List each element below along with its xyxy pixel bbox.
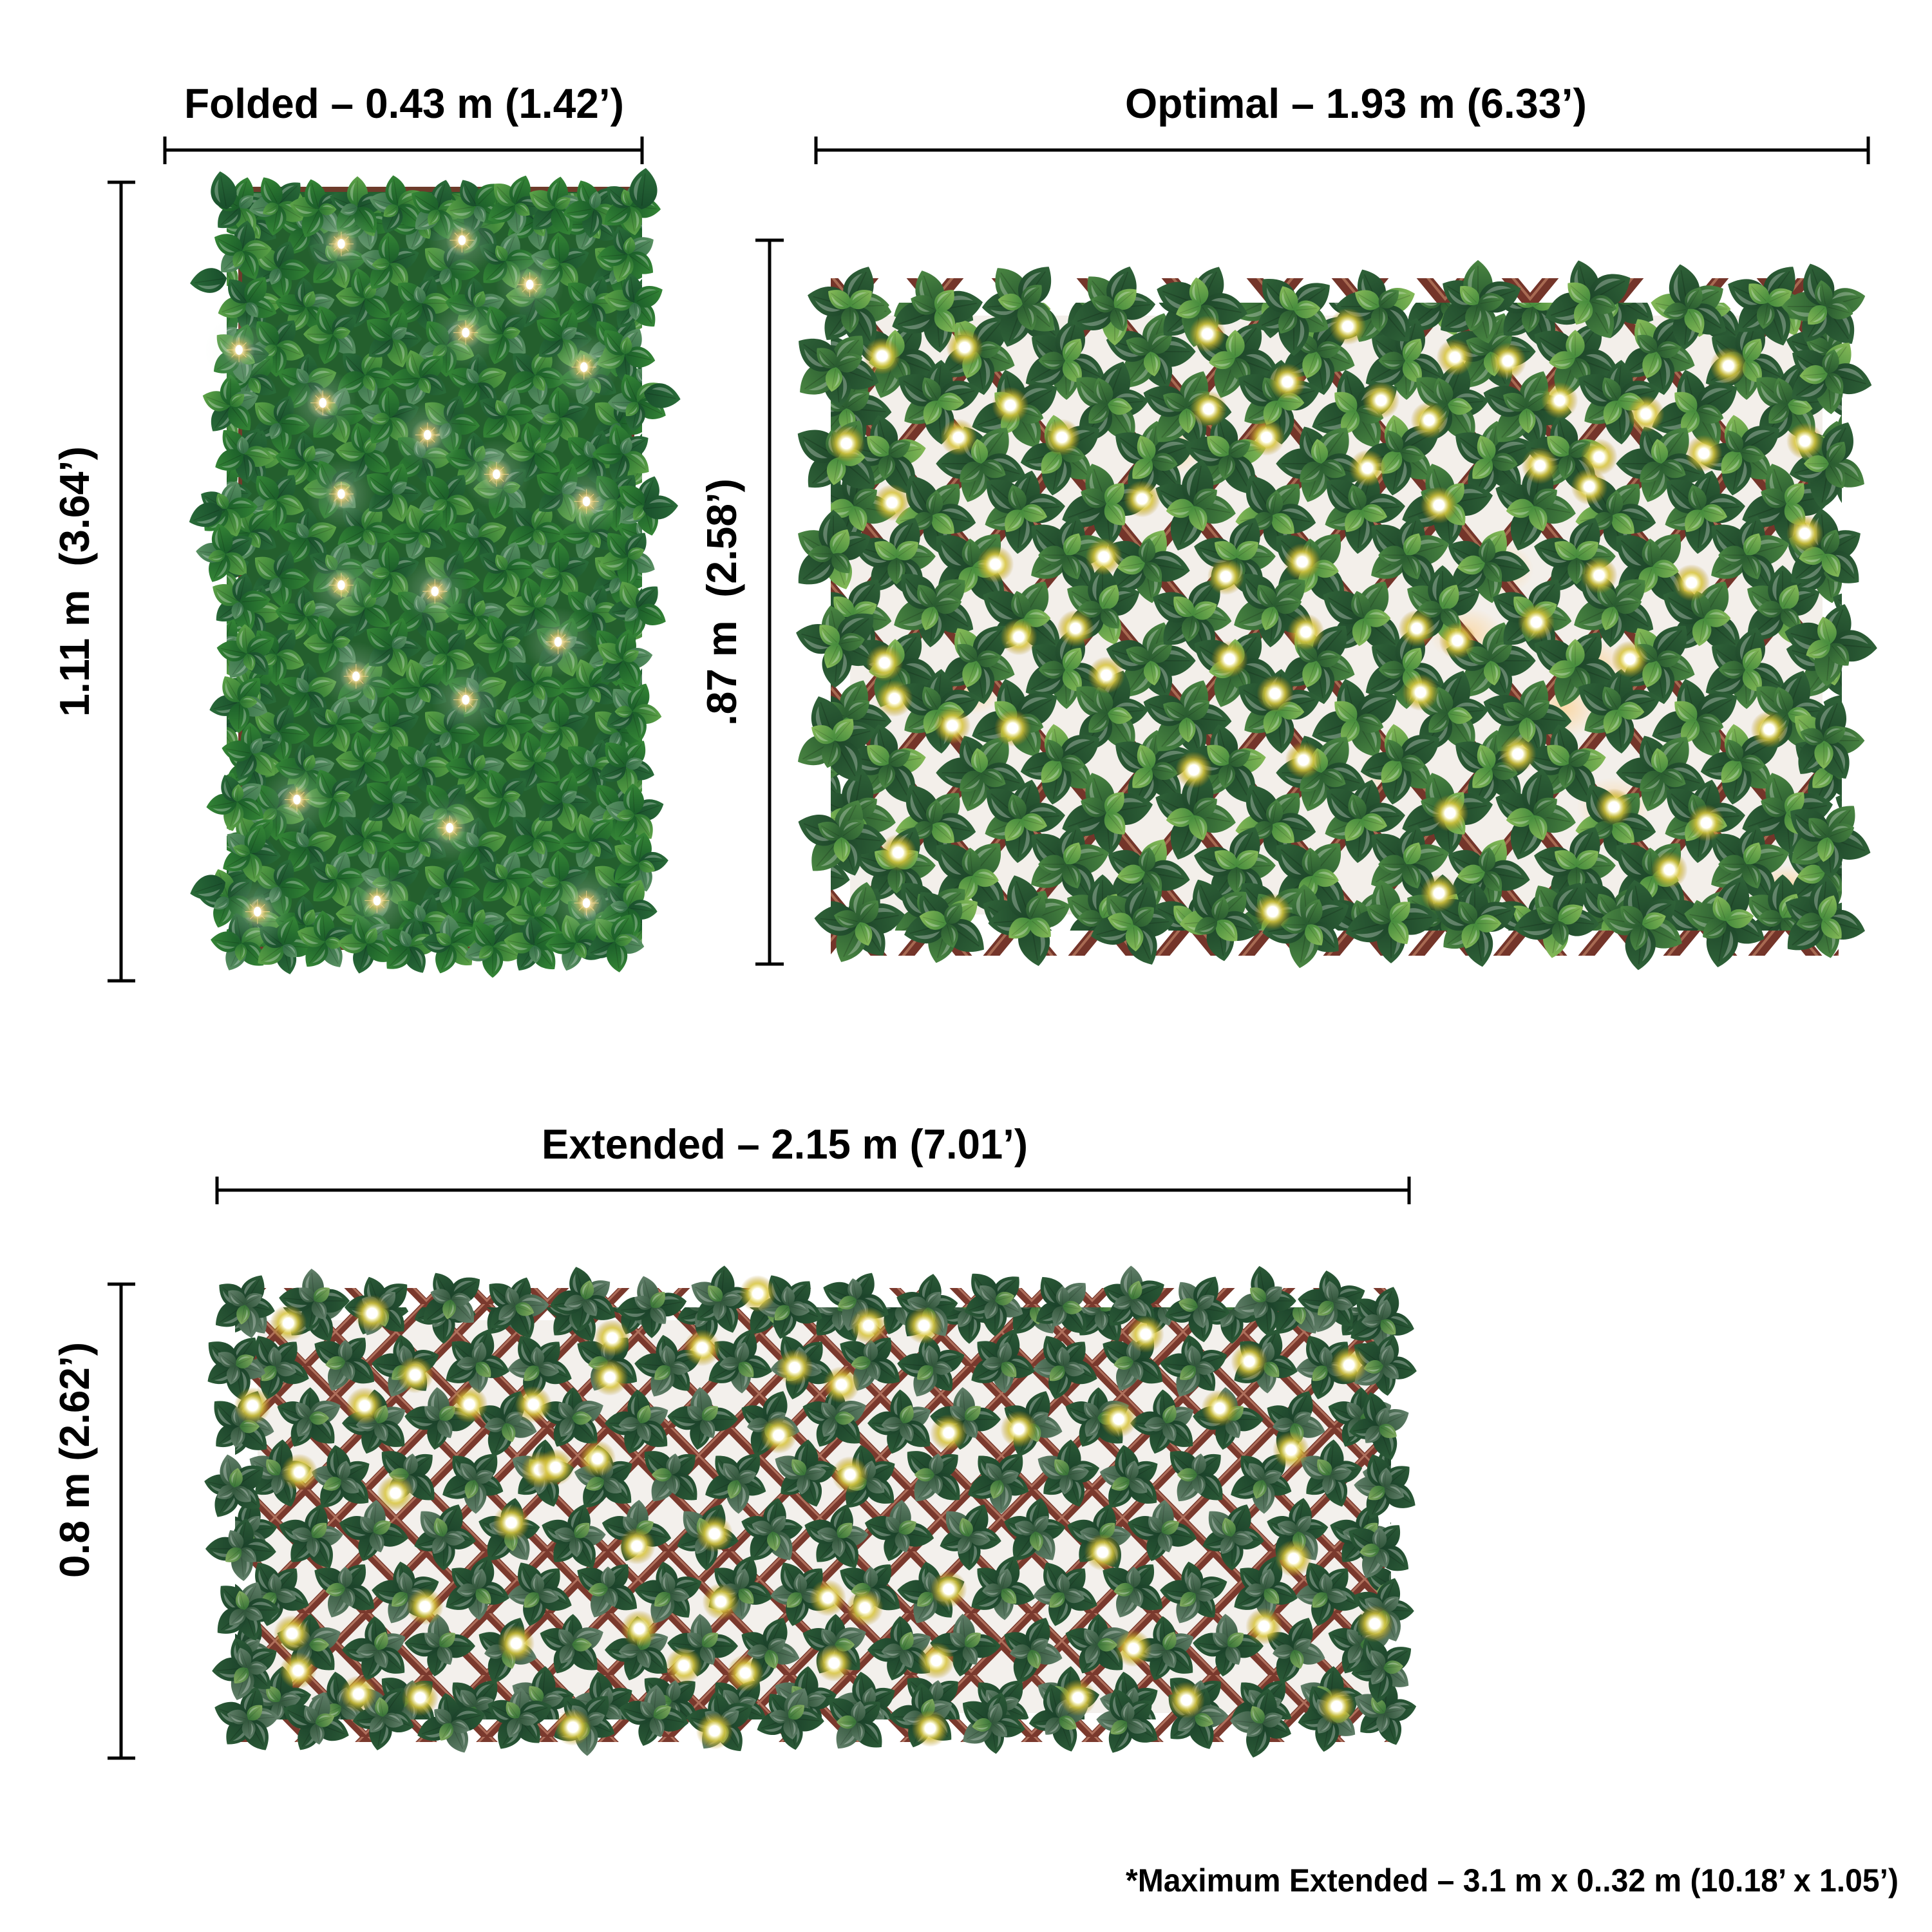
heading: optimal width: Optimal – 1.93 m (6.33’) — [1125, 80, 1587, 127]
lights on optimal trellis — [828, 308, 1823, 930]
dense foliage layer — [227, 193, 642, 947]
brown lattice, optimal — [831, 278, 1839, 956]
pale backing behind optimal lattice — [850, 316, 1823, 914]
wooden frame behind folded leaves — [238, 187, 634, 950]
panel: optimal leaf trellis — [773, 241, 1893, 989]
foliage clusters, extended — [235, 1307, 1391, 1719]
panel: extended leaf trellis — [189, 1252, 1434, 1774]
dimension bracket: extended height — [108, 1284, 135, 1758]
perimeter clusters, extended — [189, 1252, 1434, 1774]
dimension bracket: folded width — [165, 137, 642, 164]
panel: folded leaf trellis — [185, 164, 690, 990]
label: optimal height: .87 m (2.58’) — [698, 478, 745, 726]
dimension bracket: extended width — [217, 1177, 1409, 1204]
lights on folded trellis — [205, 205, 621, 946]
dimension bracket: optimal width — [816, 137, 1868, 164]
pale backing behind extended lattice — [258, 1320, 1372, 1713]
foliage clusters, optimal — [831, 303, 1842, 931]
lights on extended trellis — [234, 1275, 1394, 1749]
heading: folded width: Folded – 0.43 m (1.42’) — [184, 80, 624, 127]
footnote: maximum extended size: *Maximum Extended – 3.1 m x 0..32 m (10.18’ x 1.05’) — [1126, 1862, 1899, 1899]
dimension bracket: folded height — [108, 182, 135, 981]
heading: extended width: Extended – 2.15 m (7.01’) — [542, 1121, 1028, 1168]
perimeter clusters, optimal — [773, 241, 1893, 989]
perimeter rosettes of folded trellis — [185, 164, 690, 990]
dense foliage base — [242, 192, 631, 947]
warm glow patches behind optimal lattice — [943, 425, 1816, 909]
label: extended height: 0.8 m (2.62’) — [51, 1342, 98, 1578]
label: folded height: 1.11 m (3.64’) — [51, 446, 98, 717]
dimension bracket: optimal height — [755, 240, 784, 964]
brown lattice, extended — [235, 1288, 1391, 1742]
